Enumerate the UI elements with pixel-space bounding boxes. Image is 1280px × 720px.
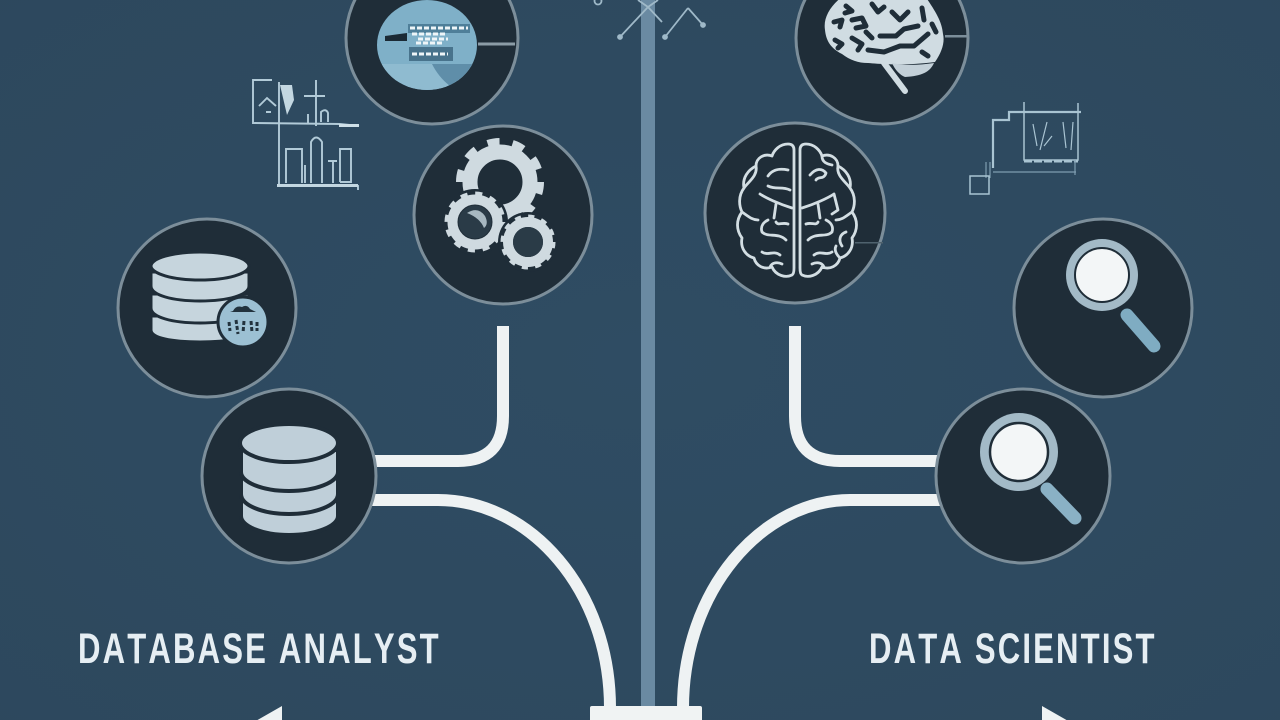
central divider bar — [641, 0, 655, 708]
heading: database analyst: DATABASE ANALYST — [78, 624, 441, 672]
arrow: right — [1042, 706, 1070, 720]
panel: top-right brain circle — [796, 0, 968, 124]
icon: right hemisphere — [800, 144, 856, 276]
heading: data scientist: DATA SCIENTIST — [869, 624, 1157, 672]
icon: left chart sketch — [253, 80, 359, 190]
icon: database cylinder — [240, 424, 338, 535]
connector: left upper — [372, 326, 503, 461]
connector: right lower — [683, 500, 945, 708]
icon: left gear — [442, 189, 508, 255]
panel: magnifier circle upper — [1014, 219, 1192, 397]
panel: gears circle — [414, 126, 592, 304]
connector: left lower — [372, 500, 610, 708]
icon: right gear — [498, 212, 558, 272]
icon: left hemisphere — [738, 144, 794, 276]
icon: magnifying glass — [980, 413, 1075, 518]
icon: small data badge — [218, 297, 268, 347]
icon: side-view brain — [825, 0, 944, 91]
panel: top-left circle with data screen icon — [346, 0, 518, 124]
icon: large gear — [460, 142, 540, 222]
icon: magnifying glass — [1066, 239, 1154, 346]
bottom centre junction box — [590, 706, 702, 720]
icon: right chart sketch — [970, 102, 1081, 194]
panel: database circle with badge — [118, 219, 296, 397]
icon: top centre network sketch — [594, 0, 705, 39]
arrow: left — [254, 706, 282, 720]
connector: right upper — [795, 326, 945, 461]
icon: database stack — [151, 252, 249, 342]
panel: top-view brain circle — [705, 123, 885, 303]
panel: database circle — [202, 389, 376, 563]
panel: magnifier circle lower — [936, 389, 1110, 563]
